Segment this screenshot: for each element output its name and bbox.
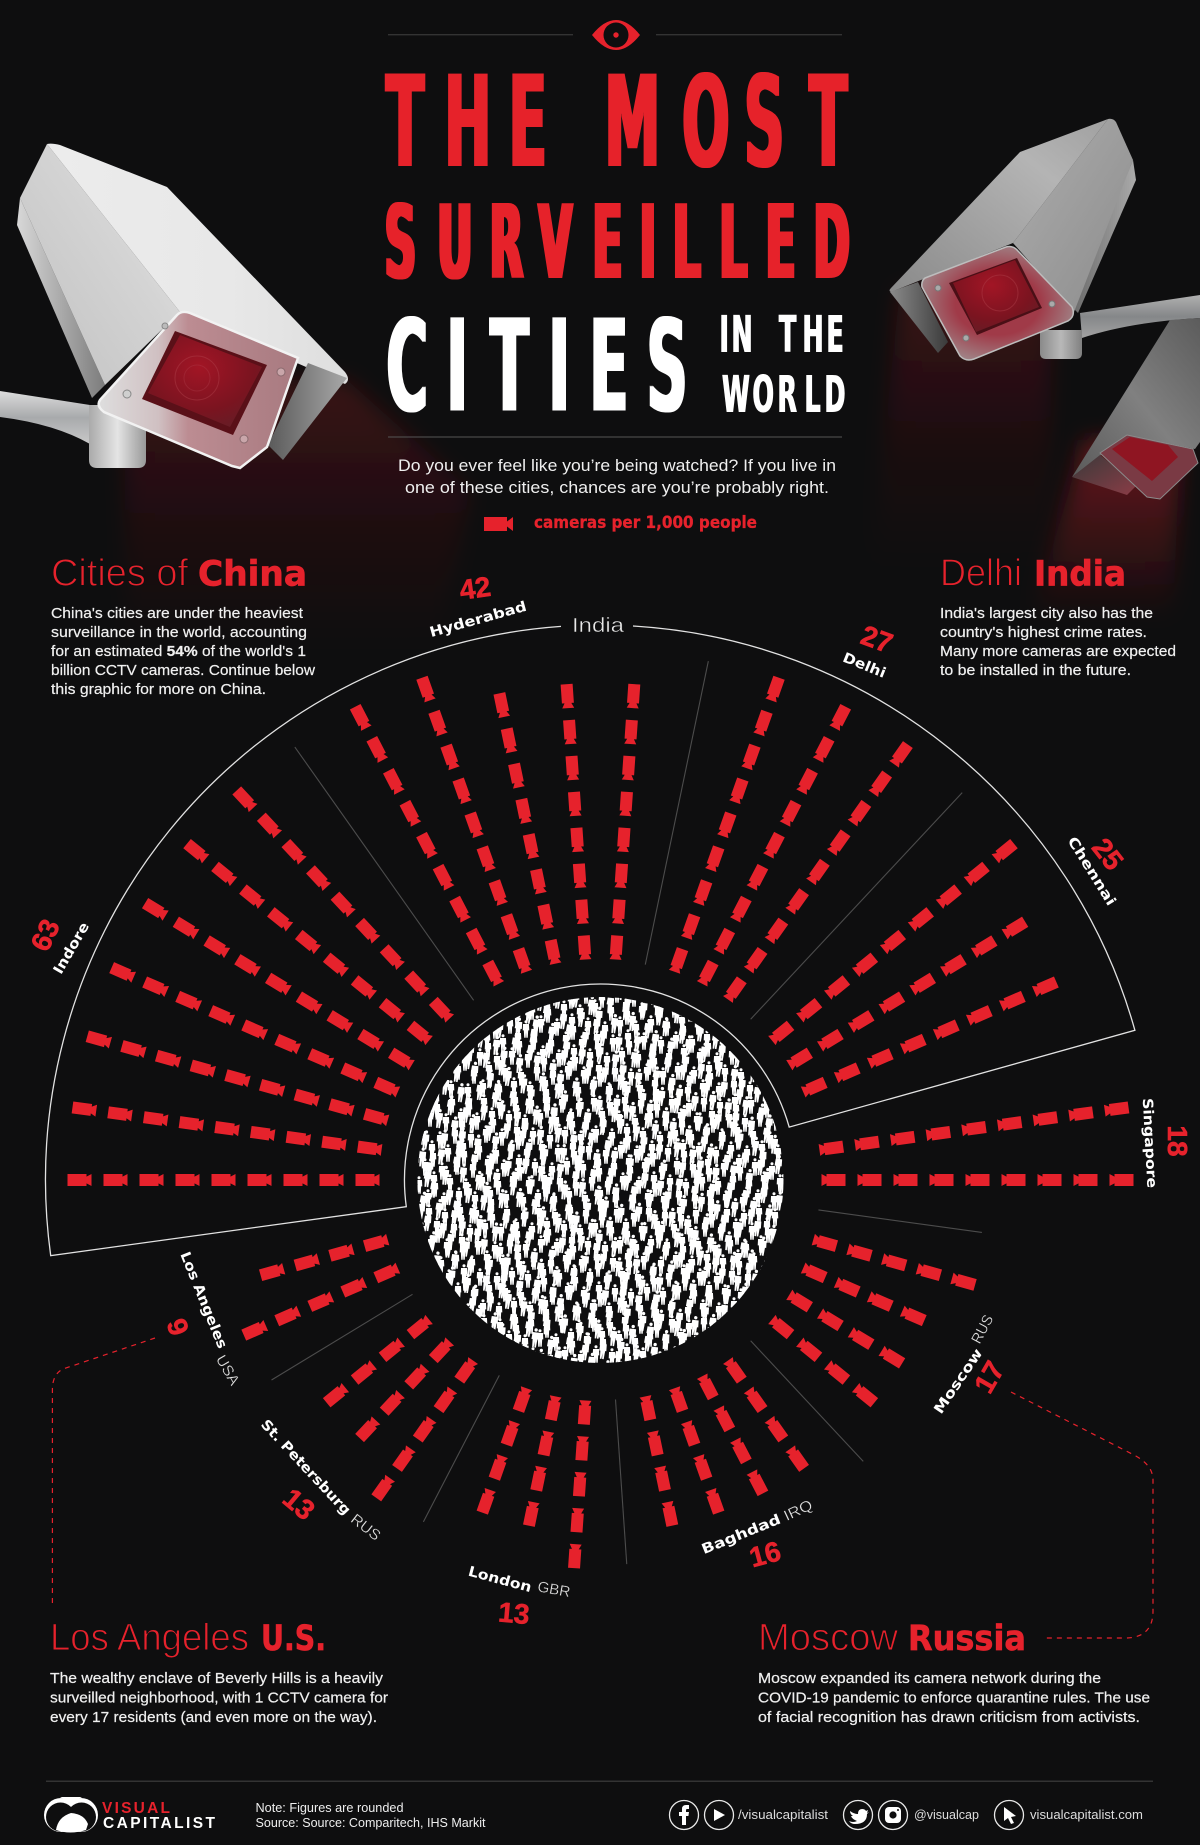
text block: this graphic for more on China. xyxy=(51,681,266,698)
city label: London GBR 13: London xyxy=(466,1564,533,1596)
city label: Singapore 18: Singapore xyxy=(1139,1098,1159,1188)
city label: London GBR 13 xyxy=(466,1564,572,1630)
title block xyxy=(385,20,850,442)
text block: India's largest city also has the xyxy=(940,605,1153,622)
heading: Moscow xyxy=(758,1617,899,1659)
site url: visualcapitalist.com xyxy=(1030,1807,1143,1822)
text block: billion CCTV cameras. Continue below xyxy=(51,662,315,679)
text block: of facial recognition has drawn criticism from activists. xyxy=(758,1709,1140,1726)
intro text: one of these cities, chances are you’re probably right. xyxy=(405,479,829,497)
handle: visualcapitalist: /visualcapitalist xyxy=(738,1807,828,1822)
text block xyxy=(50,1670,388,1726)
rays: St. Petersburg xyxy=(323,1315,478,1501)
source note: Source: Source: Comparitech, IHS Markit xyxy=(256,1816,486,1830)
rays: Moscow xyxy=(768,1234,977,1407)
text block: for an estimated 54% of the world's 1 xyxy=(51,643,306,660)
city label: Chennai 25: 25 xyxy=(1086,832,1130,876)
logo wordmark: VISUAL xyxy=(102,1800,170,1817)
heading xyxy=(758,1617,1026,1659)
city label: Moscow RUS 17: 17 xyxy=(968,1356,1010,1398)
text block: China's cities are under the heaviest xyxy=(51,605,304,622)
city label: Indore 63: 63 xyxy=(25,914,66,956)
chart: radial camera rays xyxy=(68,661,1134,1569)
city label: Baghdad IRQ 16 xyxy=(699,1497,816,1573)
text block: surveillance in the world, accounting xyxy=(51,624,307,641)
rays: London xyxy=(477,1386,591,1569)
city label: Indore 63 xyxy=(25,914,93,977)
camera: top left with red beam xyxy=(0,144,470,650)
rays: Indore xyxy=(68,786,454,1186)
city label: Chennai 25 xyxy=(1064,832,1130,909)
city label: Los Angeles USA 9: 9 xyxy=(160,1314,195,1340)
camera: right edge lower with red beam xyxy=(1030,318,1200,620)
panel: Delhi India xyxy=(940,552,1176,679)
source note xyxy=(256,1801,486,1830)
city label: St. Petersburg RUS 13: St. Petersburg xyxy=(257,1417,353,1518)
city label: Delhi 27 xyxy=(840,619,897,682)
logo wordmark: CAPITALIST xyxy=(103,1815,216,1832)
city label: Singapore 18: 18 xyxy=(1162,1125,1193,1157)
text block xyxy=(758,1670,1150,1726)
icon: instagram xyxy=(878,1800,908,1830)
heading xyxy=(940,552,1126,594)
city label: Los Angeles USA 9: USA xyxy=(212,1352,243,1388)
city label: Hyderabad 42: 42 xyxy=(457,571,493,606)
city label: Los Angeles USA 9 xyxy=(160,1250,243,1388)
rays: Delhi xyxy=(669,676,913,1003)
text block: COVID-19 pandemic to enforce quarantine rules. The use xyxy=(758,1690,1150,1706)
city label: Hyderabad 42: Hyderabad xyxy=(428,599,529,641)
legend xyxy=(484,513,757,532)
source note: Note: Figures are rounded xyxy=(256,1801,404,1815)
city label: Delhi 27: 27 xyxy=(857,619,897,659)
panel: Los Angeles U.S. xyxy=(50,1617,388,1726)
text block: Moscow expanded its camera network during the xyxy=(758,1670,1101,1687)
city label: St. Petersburg RUS 13: 13 xyxy=(277,1482,321,1526)
footer rule xyxy=(46,1780,1153,1782)
city label: Baghdad IRQ 16: IRQ xyxy=(781,1497,816,1525)
title: CITIES: CITIES xyxy=(386,293,687,442)
icon: youtube xyxy=(704,1800,734,1830)
heading xyxy=(51,552,307,594)
city label: St. Petersburg RUS 13: RUS xyxy=(347,1511,384,1544)
logo mark xyxy=(44,1797,98,1832)
intro text: Do you ever feel like you’re being watched? If you live in xyxy=(398,457,836,475)
heading: U.S. xyxy=(261,1619,326,1659)
heading: Delhi xyxy=(940,552,1022,594)
camera: top right with red beam xyxy=(870,119,1200,570)
city label: Moscow RUS 17 xyxy=(931,1312,1010,1417)
logo: Visual Capitalist xyxy=(44,1797,216,1832)
rays: Singapore xyxy=(819,1101,1134,1186)
icon: twitter xyxy=(844,1800,872,1830)
city label: Moscow RUS 17: RUS xyxy=(968,1312,997,1347)
title: IN THE: IN THE xyxy=(720,306,844,365)
city label: Singapore 18 xyxy=(1139,1098,1193,1188)
heading: Cities of xyxy=(51,552,188,594)
title: THE MOST: THE MOST xyxy=(386,49,847,197)
text block: to be installed in the future. xyxy=(940,662,1131,679)
dashed connector: Los Angeles xyxy=(52,1338,155,1605)
icon: cursor xyxy=(994,1800,1024,1830)
text block: The wealthy enclave of Beverly Hills is a heavily xyxy=(50,1670,384,1687)
panel: Moscow Russia xyxy=(758,1617,1150,1726)
city label: Chennai 25: Chennai xyxy=(1064,834,1119,909)
title top rule right xyxy=(656,34,842,35)
dividers xyxy=(272,661,982,1564)
legend label: cameras per 1,000 people xyxy=(534,513,757,532)
icon: camera legend xyxy=(484,517,513,531)
city label: St. Petersburg RUS 13 xyxy=(257,1417,384,1544)
heading: Russia xyxy=(908,1619,1026,1659)
heading: Los Angeles xyxy=(50,1617,249,1659)
intro text xyxy=(398,457,836,497)
city label: London GBR 13: 13 xyxy=(497,1597,531,1630)
fan outline: India xyxy=(46,626,1135,1256)
title: SURVEILLED: SURVEILLED xyxy=(385,183,850,303)
logo wordmark xyxy=(102,1800,216,1832)
rays: Los Angeles xyxy=(241,1234,400,1341)
city label: Los Angeles USA 9: Los Angeles xyxy=(176,1250,230,1351)
heading: China xyxy=(198,554,307,594)
handle: visualcap: @visualcap xyxy=(914,1807,979,1822)
city label: Delhi 27: Delhi xyxy=(840,650,888,682)
city label: Hyderabad 42 xyxy=(428,571,529,641)
rays: Chennai xyxy=(768,839,1059,1097)
rays: Baghdad xyxy=(640,1357,809,1527)
title bottom rule xyxy=(388,436,842,438)
dashed connector: Moscow xyxy=(1011,1392,1153,1638)
crowd of people xyxy=(418,997,784,1363)
icon: facebook xyxy=(670,1800,698,1830)
title: WORLD: WORLD xyxy=(722,366,845,425)
city label: Indore 63: Indore xyxy=(51,920,93,977)
social icons and handles xyxy=(670,1800,1143,1830)
title top rule left xyxy=(388,34,573,35)
text block: every 17 residents (and even more on the way). xyxy=(50,1709,377,1726)
text block xyxy=(51,605,315,698)
heading: India xyxy=(1034,554,1126,594)
city label: Moscow RUS 17: Moscow xyxy=(931,1346,986,1417)
panel: cities of China xyxy=(51,552,315,698)
icon: eye xyxy=(592,20,640,50)
city label: London GBR 13: GBR xyxy=(536,1579,572,1601)
India label: India xyxy=(572,615,625,637)
text block: surveilled neighborhood, with 1 CCTV camera for xyxy=(50,1690,388,1706)
city label: Baghdad IRQ 16: 16 xyxy=(746,1535,784,1573)
text block: Many more cameras are expected xyxy=(940,643,1176,660)
text block xyxy=(940,605,1176,679)
city label: Baghdad IRQ 16: Baghdad xyxy=(699,1512,783,1558)
text block: country's highest crime rates. xyxy=(940,624,1147,641)
rays: Hyderabad xyxy=(350,676,640,987)
